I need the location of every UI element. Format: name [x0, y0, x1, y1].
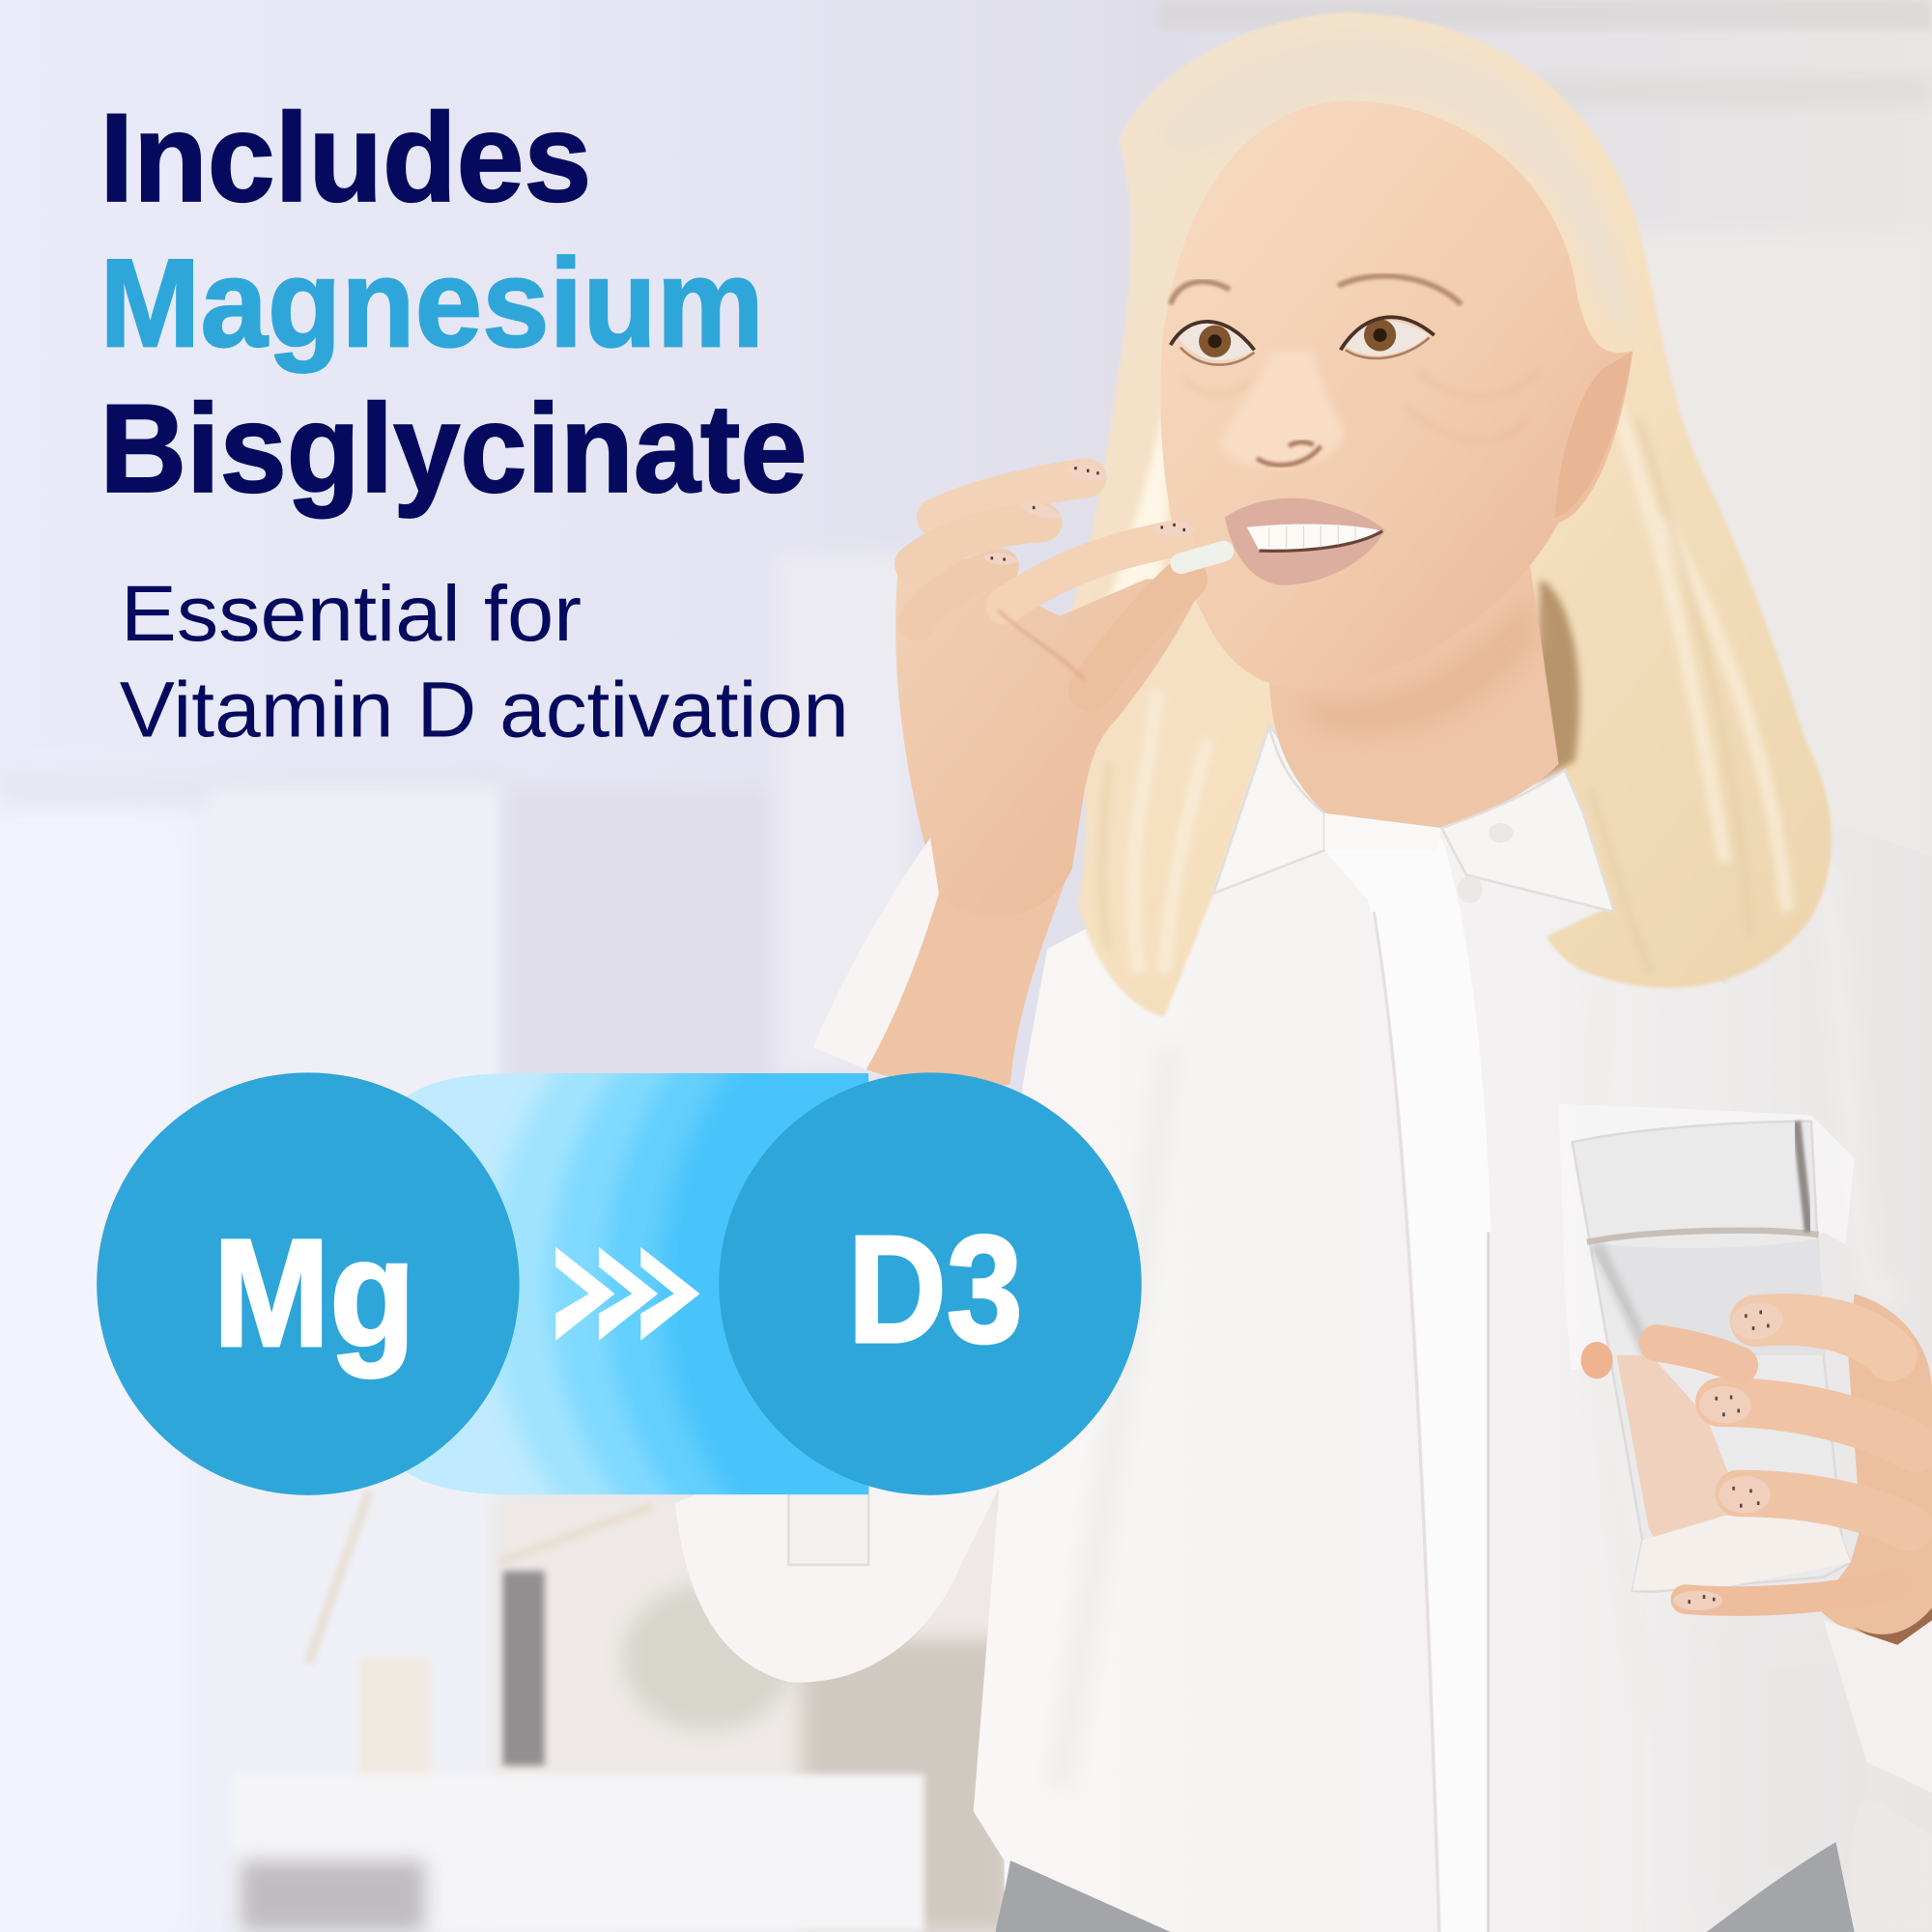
fingers — [914, 478, 1185, 690]
left shirt sleeve — [675, 838, 1932, 1793]
hand holding glass — [1580, 1293, 1932, 1649]
woman: neck and face — [1160, 100, 1633, 828]
woman: eyes and brows — [1171, 276, 1462, 365]
arrow: triple chevrons — [555, 1247, 699, 1341]
circle: Mg — [97, 1072, 520, 1495]
woman: collar and buttons — [1213, 727, 1614, 912]
nose — [1220, 352, 1345, 468]
circle: D3: D3 — [848, 1204, 1023, 1375]
forearm and raised hand — [867, 465, 1236, 1087]
subtitle: Essential for Vitamin D activation — [120, 570, 849, 754]
fingernails — [983, 465, 1197, 565]
subtitle: Essential for Vitamin D activation: Vitamin D activation — [120, 667, 849, 754]
title: Includes Magnesium Bisglycinate: Magnesium — [99, 232, 764, 373]
woman: mouth and teeth — [1225, 498, 1385, 585]
fingernails — [1673, 1299, 1785, 1610]
light blue transition band — [407, 1073, 869, 1495]
pill — [1168, 538, 1236, 577]
palm — [895, 529, 1205, 917]
subtitle: Essential for Vitamin D activation: Essential for — [121, 570, 582, 658]
circle: Mg: Mg — [213, 1208, 415, 1378]
title: Includes Magnesium Bisglycinate — [99, 87, 807, 519]
circle: D3 — [719, 1072, 1142, 1495]
title: Includes Magnesium Bisglycinate: Bisglycinate — [99, 378, 807, 519]
glass of water — [1559, 1104, 1855, 1592]
woman: shirt and torso — [974, 727, 1932, 1932]
title: Includes Magnesium Bisglycinate: Includes — [99, 87, 591, 228]
diagram: Mg converts to D3 — [97, 1072, 1142, 1495]
woman: hair — [1047, 13, 1832, 1016]
